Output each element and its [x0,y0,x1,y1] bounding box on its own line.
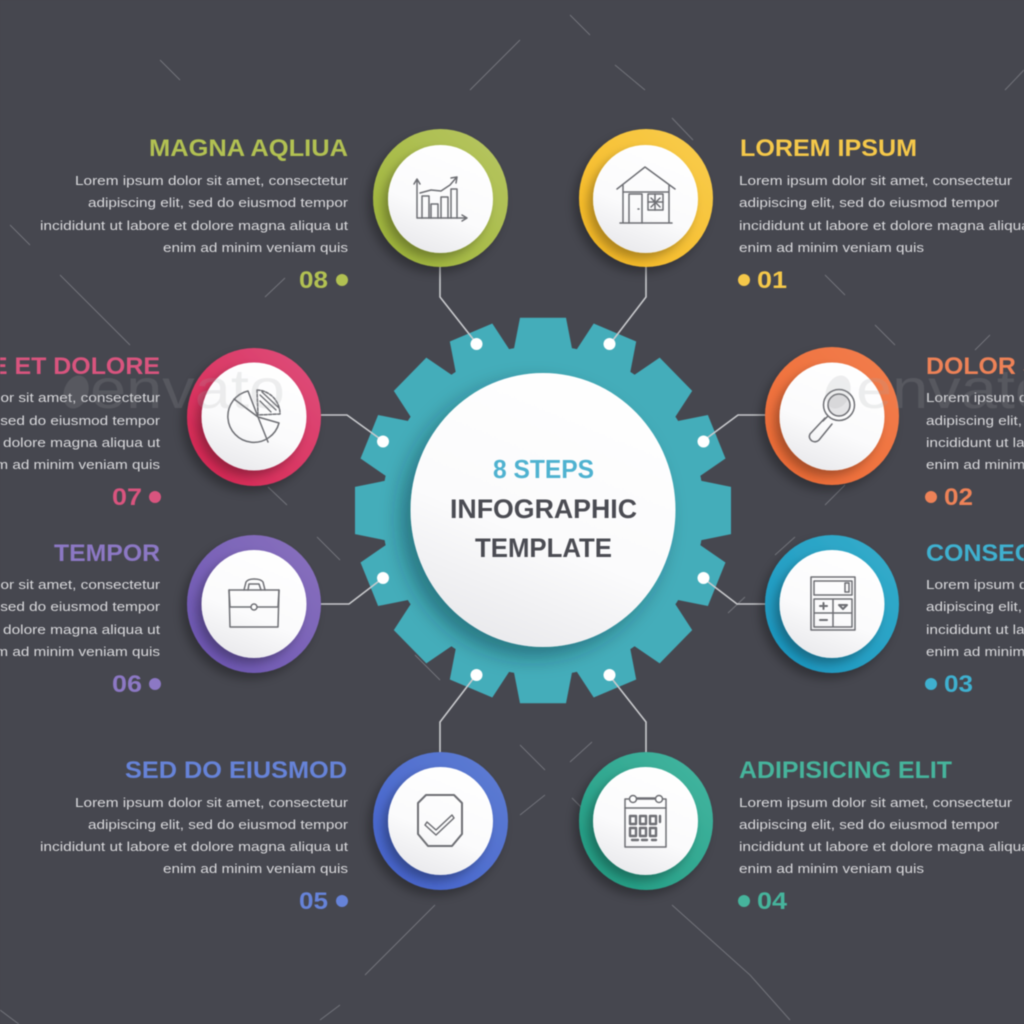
text: step 02 [925,353,1024,511]
text: step 04 [738,757,1024,915]
text: step 06: TEMPOR [54,540,160,567]
text: step 07: 07 [112,484,142,511]
text: step 05: adipiscing elit, sed do eiusmod tempor [88,817,349,832]
text: step 04: adipiscing elit, sed do eiusmod tempor [739,817,1000,832]
watermark: envato [856,357,1024,420]
text: step 05: Lorem ipsum dolor sit amet, consectetur [75,795,349,810]
watermark [59,357,1024,420]
text: step 01: Lorem ipsum dolor sit amet, consectetur [739,173,1013,188]
node 08: chart [373,129,508,267]
text: step 01: adipiscing elit, sed do eiusmod tempor [739,195,1000,210]
text: step 05: incididunt ut labore et dolore magna aliqua ut [40,839,348,854]
text: step 05 [40,757,349,915]
text: step 05: 05 [299,888,328,915]
text: step 04: enim ad minim veniam quis [739,861,925,876]
icon: bar chart [414,177,467,221]
icon: shield check [418,795,462,846]
icon: house [617,167,675,223]
center title: 8 STEPS [493,454,594,484]
text: step 04: 04 [757,888,788,915]
text: step 04: Lorem ipsum dolor sit amet, consectetur [739,795,1013,810]
node 02: magnifier [765,347,899,485]
center title: INFOGRAPHIC [450,494,637,524]
node 06: briefcase [187,535,321,673]
node 01: house [579,129,713,267]
text: step 08: Lorem ipsum dolor sit amet, consectetur [75,173,349,188]
text: step 08: enim ad minim veniam quis [163,240,349,255]
text: step 08: 08 [299,267,328,294]
text: step 03: 03 [944,671,973,698]
center title [450,454,637,563]
center title: TEMPLATE [475,533,612,563]
icon: briefcase [229,579,279,627]
text: step 01: LOREM IPSUM [740,135,917,162]
text: step 08: incididunt ut labore et dolore magna aliqua ut [40,218,348,233]
text: step 04: incididunt ut labore et dolore magna aliqua ut [739,839,1024,854]
text: step 05: enim ad minim veniam quis [163,861,349,876]
gear [355,318,731,703]
icon: calculator [811,577,855,630]
icon: pie chart [228,390,280,442]
text: step 01: 01 [757,267,787,294]
text: step 01: enim ad minim veniam quis [739,240,925,255]
text: step 06 [0,540,161,698]
text: step 02: 02 [944,484,973,511]
text: step 08: MAGNA AQLIUA [149,135,348,162]
text: step 01 [738,135,1024,294]
text: step 01: incididunt ut labore et dolore magna aliqua ut [739,218,1024,233]
text: step 03 [925,540,1024,698]
node 07: pie chart [187,348,321,486]
text: step 05: SED DO EIUSMOD [125,757,347,784]
icon: calendar [625,796,666,847]
watermark: envato [90,357,285,420]
text: step 07 [0,353,161,511]
center circle [410,373,676,647]
text: step 08 [40,135,349,294]
node 05: shield [373,752,508,890]
text: step 06: 06 [112,671,142,698]
text: step 04: ADIPISICING ELIT [739,757,952,784]
node 04: calendar [579,752,713,890]
icon: magnifier [809,390,854,442]
node 03: calculator [765,535,899,673]
connectors with gear dots [321,267,765,753]
text: step 08: adipiscing elit, sed do eiusmod tempor [88,195,349,210]
